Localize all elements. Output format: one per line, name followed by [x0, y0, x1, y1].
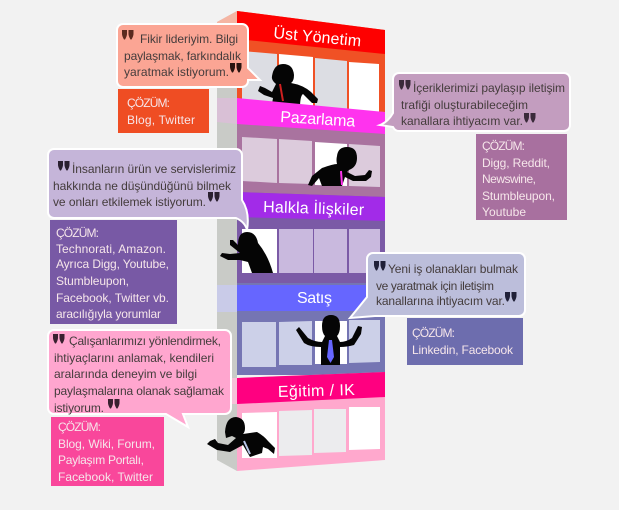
callout: public relations [48, 149, 248, 324]
speech bubble [350, 253, 525, 318]
band: Üst Yönetim [237, 11, 385, 54]
figure: sales [296, 315, 362, 365]
band: Eğitim / IK [237, 372, 385, 404]
callout: sales [350, 253, 525, 365]
windows: floor 4 [242, 320, 380, 367]
solution box: Newswine, [482, 172, 536, 186]
solution box [51, 417, 164, 486]
solution box: aracılığıyla yorumlar [56, 307, 161, 321]
speech bubble [117, 24, 260, 87]
building side wall [217, 11, 237, 471]
band: Üst Yönetim: Üst Yönetim [273, 24, 362, 50]
windows: floor 3 [242, 229, 380, 273]
solution box: Stumbleupon, [482, 189, 555, 203]
figure: marketing [308, 147, 372, 186]
solution box [407, 318, 523, 365]
solution box: Youtube [482, 205, 526, 219]
floor walls [237, 11, 385, 471]
solution box: ÇÖZÜM: [482, 139, 525, 153]
quote text: Fikir lideriyim. Bilgi [140, 32, 238, 46]
quote text: kanallarına ihtiyacım var. [376, 294, 505, 308]
solution box [50, 220, 177, 324]
band: Satış: Satış [297, 290, 332, 307]
quote text [374, 261, 519, 308]
solution box: Digg, Reddit, [482, 156, 550, 170]
quote text: kanallara ihtiyacım var. [401, 114, 523, 128]
speech bubble [48, 149, 248, 230]
solution box: Blog, Wiki, Forum, [58, 437, 155, 451]
band: Halkla İlişkiler: Halkla İlişkiler [263, 197, 365, 219]
quote text: istiyorum. [54, 401, 104, 415]
quote text: trafiği oluşturabileceğim [401, 98, 528, 112]
quote text [399, 80, 565, 128]
windows: floor 2 [242, 137, 380, 187]
solution box: Linkedin, Facebook [412, 343, 514, 357]
windows: floor 1 [242, 51, 379, 114]
callout: executive [117, 24, 260, 133]
callout: marketing [380, 73, 570, 220]
figure: public relations [220, 232, 273, 273]
solution box: Facebook, Twitter [58, 470, 153, 484]
solution box: Paylaşım Portalı, [58, 453, 144, 467]
speech bubble [48, 330, 231, 427]
quote text: hakkında ne düşündüğünü bilmek [53, 179, 232, 193]
solution box: Facebook, Twitter vb. [56, 291, 169, 305]
figure: training [207, 417, 275, 457]
quote text: paylaşmalarına olanak sağlamak [54, 384, 225, 398]
quote text: ihtiyaçlarını anlamak, kendileri [54, 351, 214, 365]
quote text: Çalışanlarımızı yönlendirmek, [69, 334, 221, 348]
quote text [53, 334, 225, 415]
quote text: ve onları etkilemek istiyorum. [53, 195, 206, 209]
solution box [118, 89, 209, 133]
quote text: aralarında deneyim ve bilgi [54, 367, 197, 381]
band: Satış [237, 285, 385, 311]
speech bubble [380, 73, 570, 131]
quote text: İnsanların ürün ve servislerimiz [72, 162, 236, 176]
quote text: yaratmak istiyorum. [124, 65, 229, 79]
building [207, 11, 385, 471]
band: Pazarlama [237, 98, 385, 134]
solution box: ÇÖZÜM: [412, 326, 455, 340]
solution box: ÇÖZÜM: [127, 96, 170, 110]
quote text [53, 161, 236, 209]
solution box: Blog, Twitter [127, 113, 195, 127]
band: Eğitim / IK: Eğitim / IK [278, 382, 355, 401]
figure: executive [258, 64, 318, 108]
windows: floor 5 [242, 407, 380, 458]
band: Pazarlama: Pazarlama [280, 109, 356, 131]
solution box: ÇÖZÜM: [58, 420, 101, 434]
quote text [122, 30, 242, 79]
quote text: Yeni iş olanakları bulmak [388, 262, 519, 276]
quote text: paylaşmak, farkındalık [124, 49, 242, 63]
quote text: İçeriklerimizi paylaşıp iletişim [413, 81, 565, 95]
solution box [476, 134, 567, 220]
solution box: Ayrıca Digg, Youtube, [56, 257, 169, 271]
callout: training [48, 330, 231, 486]
solution box: ÇÖZÜM: [56, 226, 99, 240]
band: Halkla İlişkiler [237, 192, 385, 221]
quote text: ve yaratmak için iletişim [376, 279, 494, 293]
solution box: Technorati, Amazon. [56, 242, 166, 256]
solution box: Stumbleupon, [56, 274, 129, 288]
